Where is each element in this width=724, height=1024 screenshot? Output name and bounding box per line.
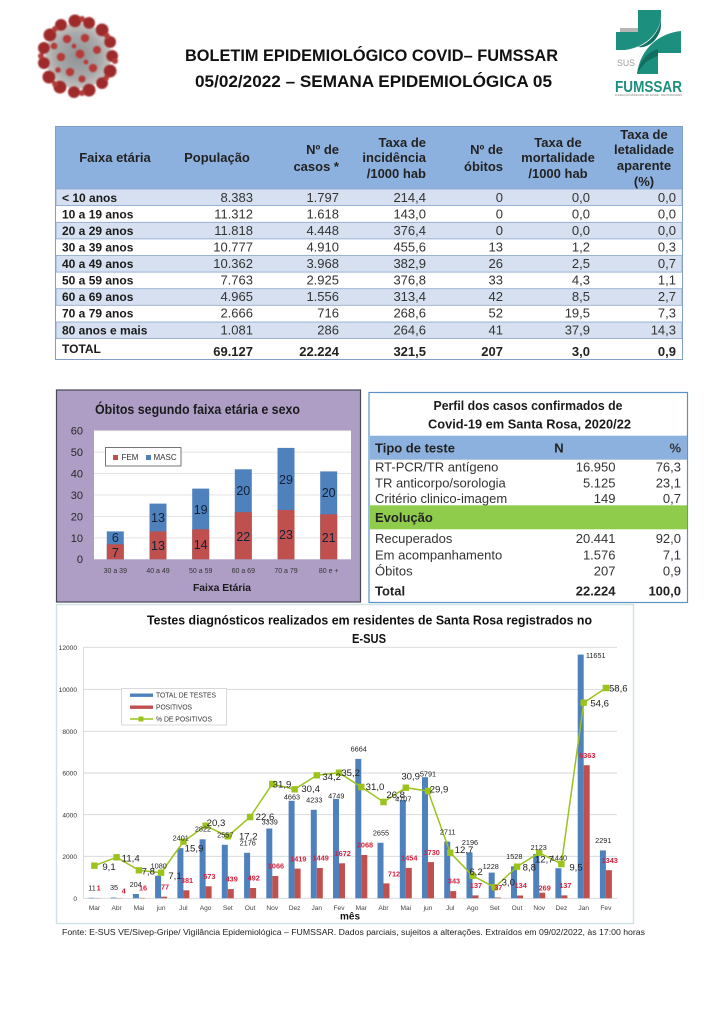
test type rows: 23,1 <box>656 476 681 490</box>
gridlines and y axis: 10000 <box>59 687 77 694</box>
logo: FUMSSAR <box>615 10 682 97</box>
labels: positive tests <box>97 751 618 895</box>
month labels: Set <box>490 905 500 912</box>
test type rows: TR anticorpo/sorologia <box>375 476 507 490</box>
month labels: Abr <box>111 905 123 912</box>
month labels: Set <box>223 905 233 912</box>
title <box>185 46 558 91</box>
labels: total tests: 1228 <box>483 862 499 871</box>
gridlines and y axis: 2000 <box>62 854 77 861</box>
evolution rows <box>375 531 681 578</box>
month labels: Fev <box>600 905 612 912</box>
bar data labels: 13 <box>151 539 165 553</box>
labels: percent positive: 12,7 <box>535 855 554 866</box>
table header: Taxa de <box>534 135 582 150</box>
row: 80 and over <box>62 322 676 338</box>
evolution rows: 1.576 <box>583 548 616 562</box>
row: 20 to 29: 0,0 <box>572 223 590 238</box>
labels: positive tests: 77 <box>161 883 169 892</box>
labels: percent positive: 31,0 <box>366 782 384 793</box>
row: 40 to 49: 40 a 49 anos <box>62 257 134 271</box>
month labels: Dez <box>556 905 567 912</box>
bar data labels: 20 <box>322 486 336 500</box>
labels: percent positive: 17,2 <box>239 832 258 843</box>
row: 20 to 29: 11.818 <box>214 223 253 238</box>
labels: positive tests: 343 <box>448 877 460 886</box>
labels: positive tests: 2068 <box>357 841 373 850</box>
row: total: 0,9 <box>658 344 676 359</box>
labels: total tests: 1080 <box>151 861 167 870</box>
labels: percent positive: 9,1 <box>102 862 116 873</box>
title: 05/02/2022 – SEMANA EPIDEMIOLÓGICA 05 <box>195 72 552 91</box>
labels: positive tests: 137 <box>470 881 482 890</box>
y axis labels: 60 <box>71 426 83 438</box>
month labels: Jul <box>179 905 188 912</box>
legend: MASC <box>154 453 177 462</box>
month labels: Nov <box>533 905 546 912</box>
table header: /1000 hab <box>367 166 426 181</box>
row: 30 to 39: 0,3 <box>658 240 676 254</box>
month labels <box>89 905 612 912</box>
row: 50 to 59: 4,3 <box>572 272 590 288</box>
labels: positive tests: 1672 <box>335 849 351 858</box>
row: 70 to 79: 268,6 <box>393 306 426 320</box>
row: under 10: 0 <box>496 190 503 205</box>
row: 30 to 39: 13 <box>489 240 503 254</box>
row: 40 to 49: 26 <box>489 256 503 271</box>
labels: positive tests: 1419 <box>290 854 306 863</box>
month labels: Out <box>245 905 256 912</box>
y axis labels: 10 <box>71 533 83 545</box>
row: 10 to 19: 0,0 <box>658 206 676 222</box>
table header: casos * <box>293 159 340 174</box>
y axis labels <box>71 426 83 566</box>
row: 70 to 79: 52 <box>489 306 503 320</box>
row: 80 and over: 14,3 <box>651 322 676 338</box>
row: 60 to 69: 2,7 <box>658 289 676 304</box>
evolution rows: 92,0 <box>656 531 681 546</box>
row: 60 to 69 <box>62 289 676 304</box>
legend: FEM <box>122 453 139 462</box>
row: 70 to 79: 7,3 <box>658 306 676 320</box>
labels: percent positive: 3,0 <box>502 878 515 889</box>
bar data labels: 20 <box>236 484 250 498</box>
labels: total tests: 2196 <box>462 838 478 847</box>
test type rows: 16.950 <box>576 460 616 474</box>
category labels: 40 a 49 <box>146 568 170 575</box>
test type rows: 149 <box>594 491 616 506</box>
month labels: Mai <box>400 905 412 912</box>
row: 50 to 59: 50 a 59 anos <box>62 274 134 288</box>
source note: Fonte: E-SUS VE/Sivep-Gripe/ Vigilância Epidemiológica – FUMSSAR. Dados parciais, sujeitos a alterações. Extraídos em 09/02/2022, às 17:00 horas <box>62 927 645 937</box>
labels: percent positive: 9,5 <box>569 863 583 874</box>
labels: percent positive: 11,4 <box>122 853 140 864</box>
row: 50 to 59: 1,1 <box>658 272 676 288</box>
chart heading <box>147 614 592 646</box>
title: BOLETIM EPIDEMIOLÓGICO COVID– FUMSSAR <box>185 46 558 65</box>
labels: total tests: 4707 <box>395 795 411 804</box>
legend: % DE POSITIVOS <box>156 716 212 724</box>
y axis labels: 40 <box>71 468 83 480</box>
labels: percent positive: 35,2 <box>341 768 360 779</box>
row: 40 to 49: 2,5 <box>572 256 590 271</box>
labels: total tests: 35 <box>110 883 118 892</box>
bar data labels: 13 <box>151 511 165 525</box>
test type rows: Critério clinico-imagem <box>375 491 507 506</box>
labels: percent positive: 22,6 <box>256 812 274 823</box>
labels: percent positive: 7,1 <box>168 871 182 882</box>
bar data labels: 23 <box>279 528 293 542</box>
month labels: Abr <box>378 905 389 912</box>
row: 40 to 49: 0,7 <box>658 256 676 271</box>
stacked bars <box>107 448 337 559</box>
row: under 10: < 10 anos <box>62 191 117 205</box>
month labels: Jul <box>446 905 455 912</box>
labels: percent positive: 58,6 <box>609 683 628 694</box>
labels: positive tests: 134 <box>515 881 528 890</box>
category labels: 80 e + <box>319 568 339 575</box>
category labels <box>104 568 339 575</box>
test type header: % <box>669 440 681 456</box>
labels: positive tests: 1730 <box>424 848 440 857</box>
logo: FUMSSAR: SUS <box>617 58 635 69</box>
row: 10 to 19: 11.312 <box>214 206 253 222</box>
row: 60 to 69: 42 <box>489 289 503 304</box>
labels: positive tests: 6363 <box>579 751 595 760</box>
labels: total tests: 2176 <box>240 838 256 847</box>
row: 40 to 49: 3.968 <box>306 256 339 271</box>
row: 70 to 79: 70 a 79 anos <box>62 306 134 320</box>
labels: total tests <box>88 651 611 892</box>
row: 10 to 19: 0,0 <box>572 206 590 222</box>
row: 80 and over: 37,9 <box>565 322 590 338</box>
labels: percent positive <box>102 683 628 889</box>
evolution rows: 7,1 <box>663 548 681 562</box>
labels: positive tests: 573 <box>203 872 215 881</box>
table header: População <box>184 150 250 165</box>
row: under 10: 1.797 <box>306 190 339 205</box>
row: 20 to 29: 376,4 <box>393 223 426 238</box>
test type rows: 76,3 <box>656 460 681 474</box>
evolution header <box>370 505 687 529</box>
row: 10 to 19 <box>62 206 676 222</box>
table header: óbitos <box>464 159 503 174</box>
line: percent positive <box>94 688 606 887</box>
legend <box>122 688 226 725</box>
table header: Nº de <box>470 142 503 157</box>
labels: total tests: 204 <box>130 880 142 889</box>
table header: letalidade <box>614 142 674 157</box>
labels: positive tests: 492 <box>248 873 260 882</box>
evolution rows: Em acompanhamento <box>375 548 502 562</box>
labels: total tests: 2557 <box>217 831 233 840</box>
bar data labels: 29 <box>279 473 293 487</box>
table row stripes <box>56 189 682 339</box>
labels: percent positive: 26,8 <box>386 790 405 801</box>
evolution rows: 20.441 <box>576 531 616 546</box>
category labels: 60 a 69 <box>232 568 255 575</box>
month labels: Dez <box>289 905 300 912</box>
y axis labels: 30 <box>71 490 83 502</box>
row: total: 3,0 <box>572 344 590 359</box>
row: 50 to 59: 7.763 <box>220 272 253 288</box>
labels: total tests: 2711 <box>440 827 456 836</box>
labels: total tests: 2401 <box>173 834 189 843</box>
row: 40 to 49: 382,9 <box>393 256 426 271</box>
chart heading: Óbitos segundo faixa etária e sexo <box>95 402 300 417</box>
row: 50 to 59 <box>62 272 676 288</box>
labels: percent positive: 6,2 <box>469 867 483 878</box>
labels: percent positive: 29,9 <box>430 785 448 796</box>
month labels: jun <box>423 905 433 912</box>
total row: Total <box>375 584 405 598</box>
labels: positive tests: 1 <box>97 884 101 893</box>
row: 80 and over: 264,6 <box>393 322 426 338</box>
row: 60 to 69: 60 a 69 anos <box>62 290 134 304</box>
labels: percent positive: 12,7 <box>455 845 473 856</box>
table header <box>56 127 682 189</box>
evolution rows: Recuperados <box>375 531 453 546</box>
labels: total tests: 11651 <box>586 651 606 660</box>
labels: percent positive: 30,9 <box>401 771 420 782</box>
row: 70 to 79: 2.666 <box>220 306 253 320</box>
row: total <box>62 342 676 359</box>
bar data labels: 14 <box>194 538 208 552</box>
row: under 10: 214,4 <box>393 190 426 205</box>
panel heading <box>428 399 631 432</box>
table header: Faixa etária <box>79 150 152 165</box>
panel: confirmed case profile <box>369 392 688 602</box>
logo: FUMSSAR: FUNDAÇÃO MUNICIPAL DE SAÚDE · SANTA ROSA/RS <box>615 92 682 97</box>
row: 30 to 39: 1,2 <box>572 240 590 254</box>
labels: total tests: 11 <box>88 884 96 892</box>
test type header: Tipo de teste <box>375 440 455 456</box>
row: under 10 <box>62 190 676 205</box>
row: 60 to 69: 1.556 <box>306 289 339 304</box>
axis title: Faixa Etária <box>193 583 251 594</box>
total row <box>375 584 681 598</box>
row: under 10: 8.383 <box>220 190 253 205</box>
test type rows: 0,7 <box>663 491 681 506</box>
labels: total tests: 2822 <box>195 825 211 834</box>
month labels: Out <box>512 905 522 912</box>
table header: (%) <box>634 174 654 189</box>
row: 80 and over: 41 <box>489 322 503 338</box>
row: 20 to 29: 0 <box>496 223 503 238</box>
labels: total tests: 6664 <box>351 745 367 754</box>
table header: mortalidade <box>521 150 595 165</box>
legend: TOTAL DE TESTES <box>156 692 216 700</box>
row: 50 to 59: 33 <box>489 272 503 288</box>
bars: positive tests <box>94 765 612 898</box>
panel heading: Perfil dos casos confirmados de <box>434 399 623 413</box>
y axis labels: 0 <box>77 554 83 566</box>
row: 10 to 19: 10 a 19 anos <box>62 208 134 222</box>
labels: total tests: 4663 <box>284 792 300 801</box>
bar data labels: 21 <box>322 531 336 545</box>
table header: incidência <box>362 150 427 165</box>
row: 50 to 59: 2.925 <box>306 272 339 288</box>
icon: coronavirus <box>38 14 118 98</box>
labels: total tests: 4749 <box>328 791 344 800</box>
labels: total tests: 2655 <box>373 829 389 838</box>
bar data labels: 19 <box>194 503 208 517</box>
labels: positive tests: 37 <box>494 883 502 892</box>
labels: percent positive: 8,8 <box>523 863 536 874</box>
row: total: 69.127 <box>213 344 253 359</box>
labels: total tests: 2291 <box>595 836 611 845</box>
labels: positive tests: 439 <box>226 875 238 884</box>
labels: percent positive: 54,6 <box>590 699 609 710</box>
month labels: Ago <box>200 905 212 912</box>
evolution rows: 207 <box>594 564 616 578</box>
legend: POSITIVOS <box>156 704 192 712</box>
test type header: N <box>554 440 564 456</box>
labels: positive tests: 1454 <box>401 854 418 863</box>
bar data labels <box>112 473 336 560</box>
month labels: Jan <box>578 905 589 912</box>
labels: positive tests: 16 <box>139 884 147 893</box>
row: total: 22.224 <box>299 344 340 359</box>
category labels: 70 a 79 <box>274 568 298 575</box>
axis title: mês <box>340 912 360 922</box>
row: total: TOTAL <box>62 342 101 356</box>
bar data labels: 7 <box>112 546 119 560</box>
labels: percent positive: 15,9 <box>185 843 203 854</box>
row: 20 to 29: 0,0 <box>658 223 676 238</box>
labels: positive tests: 1066 <box>268 862 284 871</box>
labels: total tests: 5791 <box>420 769 436 778</box>
panel heading: Covid-19 em Santa Rosa, 2020/22 <box>428 418 631 432</box>
row: 80 and over: 286 <box>317 322 339 338</box>
labels: percent positive: 34,2 <box>322 772 341 783</box>
row: 50 to 59: 376,8 <box>393 272 426 288</box>
table header: Taxa de <box>620 127 668 142</box>
panel: deaths by age and sex chart <box>56 390 360 602</box>
labels: positive tests: 1449 <box>313 854 329 863</box>
row: total: 207 <box>481 344 503 359</box>
panel: diagnostic tests chart <box>56 604 634 924</box>
gridlines and y axis: 12000 <box>59 645 77 652</box>
legend <box>106 448 181 466</box>
row: 70 to 79 <box>62 306 676 320</box>
labels: percent positive: 30,4 <box>301 784 321 795</box>
labels: positive tests: 712 <box>388 870 400 879</box>
row: 60 to 69: 8,5 <box>572 289 590 304</box>
row: 10 to 19: 0 <box>496 206 503 222</box>
gridlines and y axis: 0 <box>73 896 77 903</box>
labels: positive tests: 137 <box>559 881 571 890</box>
labels: positive tests: 4 <box>122 886 127 895</box>
row: 60 to 69: 313,4 <box>393 289 426 304</box>
row: 30 to 39 <box>62 240 676 254</box>
y axis labels: 20 <box>71 511 83 523</box>
panel: age table <box>56 126 682 360</box>
chart heading: Testes diagnósticos realizados em residentes de Santa Rosa registrados no <box>147 614 592 628</box>
month labels: Mar <box>356 905 368 912</box>
total row: 100,0 <box>648 584 681 598</box>
month labels: jun <box>156 905 166 912</box>
table header: /1000 hab <box>528 166 588 181</box>
bars: total tests <box>88 655 606 898</box>
total row: 22.224 <box>576 584 616 598</box>
test type header <box>370 436 687 460</box>
labels: positive tests: 269 <box>539 884 551 893</box>
row: 80 and over: 1.081 <box>220 322 253 338</box>
test type rows: 5.125 <box>583 476 616 490</box>
month labels: Ago <box>467 905 479 912</box>
labels: percent positive: 7,8 <box>142 867 155 878</box>
labels: percent positive: 31,9 <box>273 780 291 791</box>
row: 70 to 79: 716 <box>317 306 339 320</box>
labels: total tests: 4233 <box>306 795 322 804</box>
labels: positive tests: 1343 <box>602 856 618 865</box>
gridlines and y axis: 8000 <box>62 729 77 736</box>
row: 30 to 39: 4.910 <box>306 240 339 254</box>
row: 20 to 29 <box>62 223 676 238</box>
test type rows <box>375 460 681 506</box>
row: 30 to 39: 455,6 <box>393 240 426 254</box>
evolution header: Evolução <box>375 510 433 525</box>
table header: Nº de <box>306 142 339 157</box>
row: total: 321,5 <box>393 344 426 359</box>
table header: aparente <box>617 158 671 173</box>
row: under 10: 0,0 <box>658 190 676 205</box>
labels: total tests: 2123 <box>531 843 547 852</box>
row: under 10: 0,0 <box>572 190 590 205</box>
category labels: 50 a 59 <box>189 568 212 575</box>
row: 10 to 19: 143,0 <box>393 206 426 222</box>
gridlines and y axis: 6000 <box>62 771 77 778</box>
row: 70 to 79: 19,5 <box>565 306 590 320</box>
month labels: Nov <box>266 905 279 912</box>
plot area <box>94 431 351 559</box>
evolution rows: Óbitos <box>375 564 413 578</box>
row: 60 to 69: 4.965 <box>220 289 253 304</box>
evolution rows: 0,9 <box>663 564 681 578</box>
row: 40 to 49 <box>62 256 676 271</box>
row: 20 to 29: 4.448 <box>306 223 339 238</box>
test type rows: RT-PCR/TR antígeno <box>375 460 498 474</box>
category labels: 30 a 39 <box>104 568 127 575</box>
labels: total tests: 1440 <box>551 854 567 863</box>
row: 30 to 39: 30 a 39 anos <box>62 240 134 254</box>
labels: positive tests: 381 <box>181 876 193 885</box>
bar data labels: 22 <box>236 530 250 544</box>
row: 10 to 19: 1.618 <box>306 206 339 222</box>
labels: total tests: 1528 <box>506 852 522 861</box>
table header: Taxa de <box>379 135 426 150</box>
labels: percent positive: 20,3 <box>207 818 225 829</box>
row: 80 and over: 80 anos e mais <box>62 324 148 338</box>
row: 40 to 49: 10.362 <box>213 256 253 271</box>
month labels: Mai <box>134 905 145 912</box>
month labels: Mar <box>89 905 101 912</box>
bar data labels: 6 <box>112 531 119 545</box>
gridlines and y axis: 4000 <box>62 812 77 819</box>
labels: total tests: 3339 <box>262 818 278 827</box>
logo: FUMSSAR: FUMSSAR <box>615 79 682 96</box>
chart heading: E-SUS <box>352 632 386 646</box>
month labels: Fev <box>334 905 345 912</box>
row: 30 to 39: 10.777 <box>213 240 253 254</box>
gridlines and y axis <box>59 645 617 903</box>
row: 20 to 29: 20 a 29 anos <box>62 224 134 238</box>
y axis labels: 50 <box>71 447 83 459</box>
month labels: Jan <box>311 905 322 912</box>
